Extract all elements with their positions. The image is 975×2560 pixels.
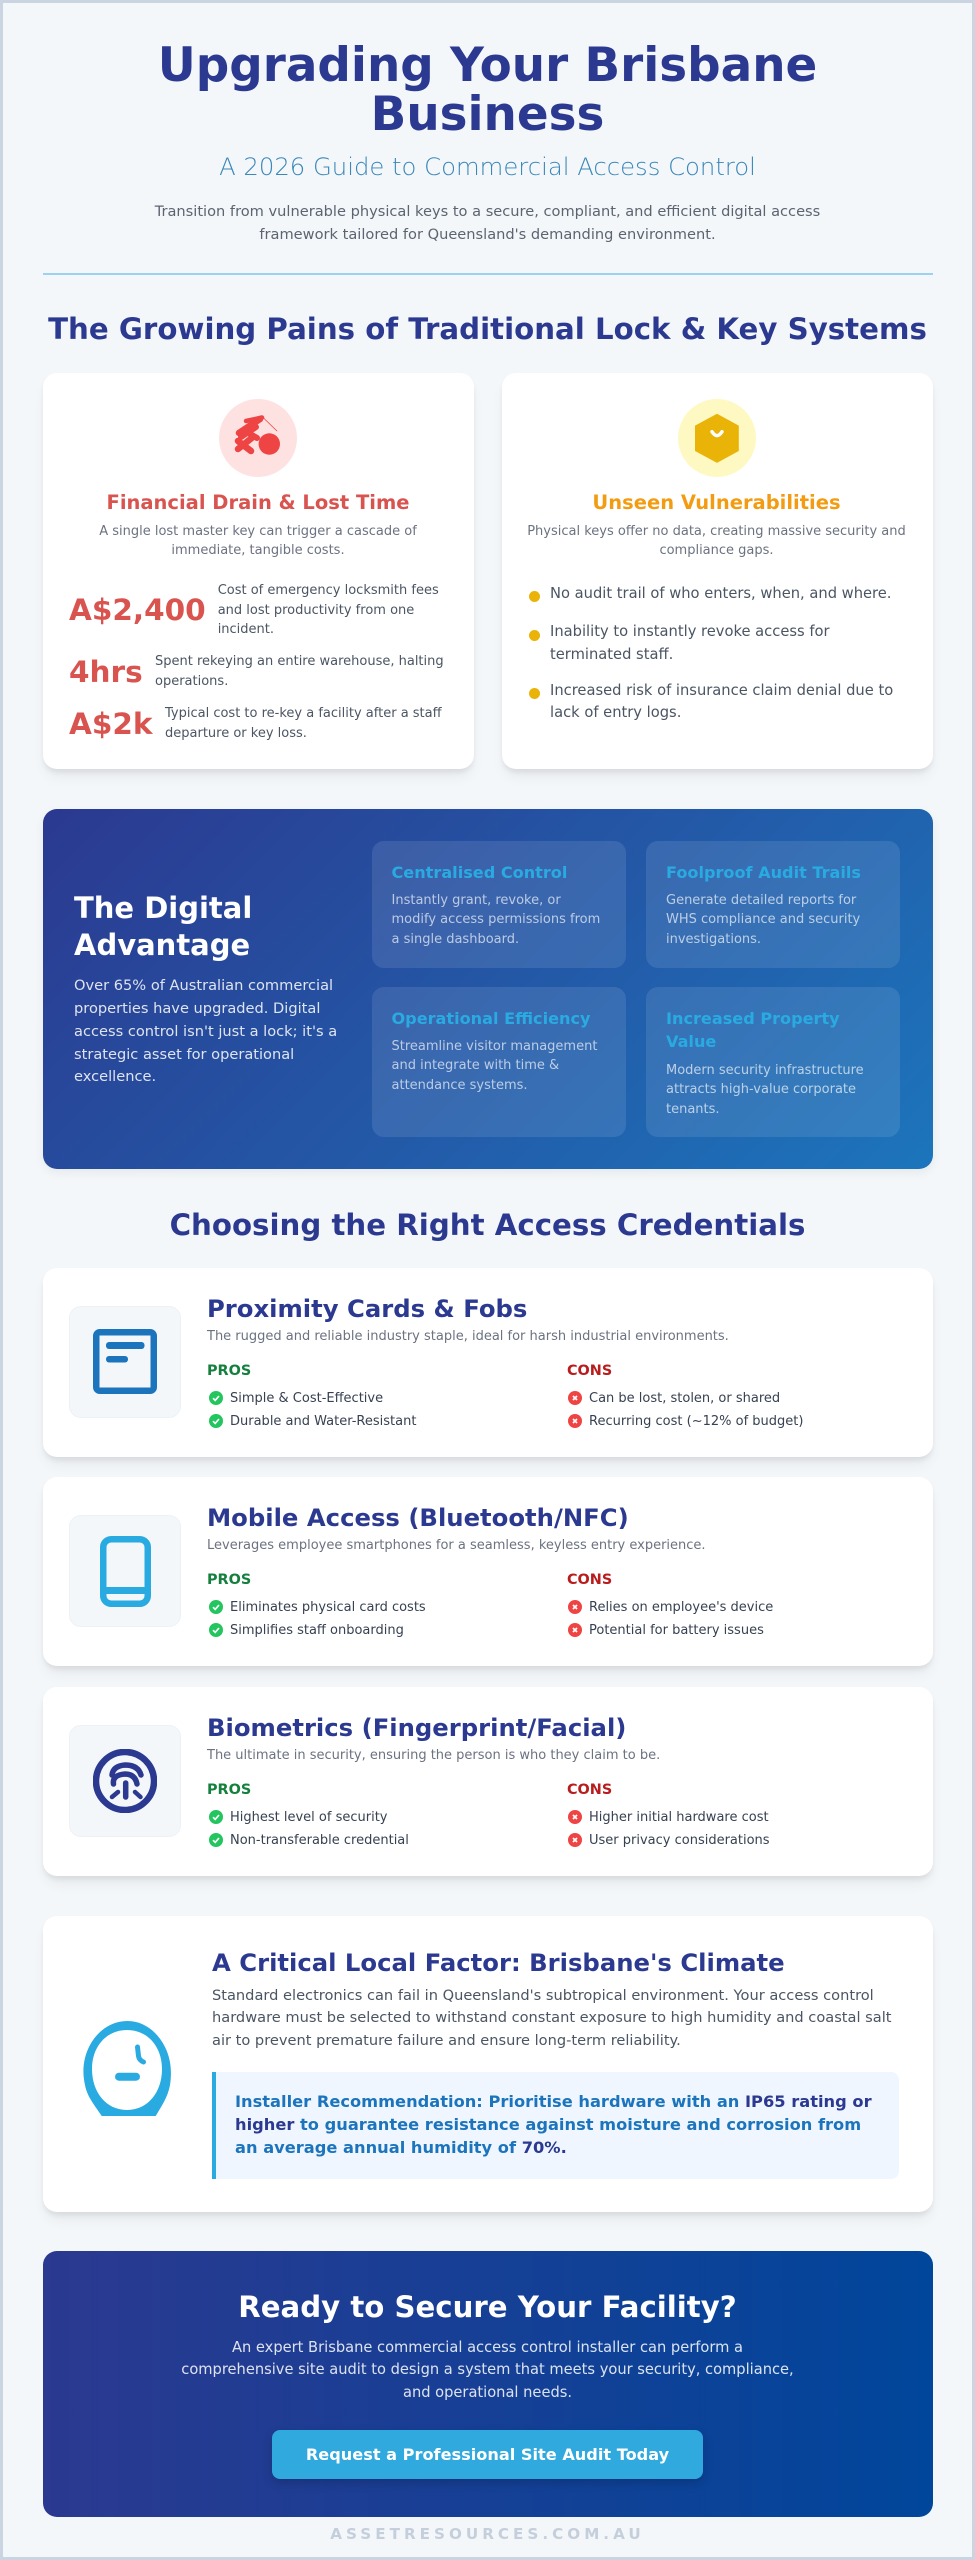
stat: 4hrs: 4hrs	[69, 655, 143, 689]
title	[158, 39, 817, 142]
text: call to action: and operational needs.	[403, 2384, 572, 2401]
icon: broken key and coin	[219, 399, 297, 477]
heading: growing pains: The Growing Pains of Traditional Lock & Key Systems	[48, 312, 927, 346]
icon: access card	[69, 1306, 181, 1418]
heading: call to action: Ready to Secure Your Facility?	[238, 2290, 737, 2324]
text: climate summary: air to prevent premature failure and ensure long-term reliability.	[212, 2032, 681, 2049]
pros list: Eliminates physical card costs	[230, 1600, 426, 1615]
pros list: Simplifies staff onboarding	[230, 1622, 404, 1638]
text: digital advantage summary: excellence.	[74, 1068, 156, 1085]
cons list	[567, 1572, 773, 1638]
text: digital advantage summary: properties have upgraded. Digital	[74, 1000, 320, 1017]
benefit: increased property value: tenants.	[666, 1102, 720, 1117]
text: digital advantage summary: access control isn't just a lock; it's a	[74, 1023, 337, 1040]
stat text: rekeying time: Spent rekeying an entire warehouse, halting	[155, 654, 444, 669]
cons list: Recurring cost (~12% of budget)	[589, 1414, 803, 1428]
benefit: centralised control: Centralised Control	[392, 863, 567, 882]
cons list: Higher initial hardware cost	[589, 1810, 769, 1825]
panel: financial drain	[43, 373, 474, 769]
bullet: insurance risk	[529, 682, 893, 721]
panel: the digital advantage	[42, 809, 932, 1169]
bullet: audit trail: No audit trail of who enters, when, and where.	[550, 584, 891, 602]
benefit: operational efficiency: Streamline visitor management	[392, 1039, 597, 1054]
icon: smartphone	[69, 1515, 181, 1627]
subtitle: A 2026 Guide to Commercial Access Control	[219, 152, 756, 181]
benefit: increased property value: Increased Property	[666, 1009, 840, 1028]
text: biometrics summary: The ultimate in security, ensuring the person is who they claim to be.	[207, 1748, 660, 1763]
callout: installer recommendation: an average annual humidity of 70%.	[235, 2138, 567, 2157]
heading: financial drain: Financial Drain & Lost Time	[106, 491, 409, 514]
text: climate summary: Standard electronics can fail in Queensland's subtropical environment. Your access control	[212, 1986, 874, 2004]
footer: website: ASSETRESOURCES.COM.AU	[330, 2524, 645, 2542]
intro text: Transition from vulnerable physical keys to a secure, compliant, and efficient digital access	[155, 203, 820, 220]
intro text	[154, 203, 820, 243]
benefit: increased property value: Modern security infrastructure	[666, 1063, 864, 1078]
text: vulnerabilities summary	[527, 524, 906, 558]
callout: installer recommendation: higher to guarantee resistance against moisture and corrosion from	[235, 2115, 861, 2134]
text: climate summary: hardware must be selected to withstand constant exposure to high humidity and coastal salt	[212, 2009, 892, 2026]
pros list: Highest level of security	[230, 1810, 388, 1825]
pros list: PROS	[207, 1782, 251, 1798]
panel: call to action	[42, 2251, 932, 2517]
text: financial summary: immediate, tangible costs.	[171, 543, 345, 558]
benefit: operational efficiency: attendance systems.	[392, 1078, 528, 1093]
intro text: framework tailored for Queensland's demanding environment.	[259, 226, 716, 243]
icon: fingerprint	[69, 1725, 181, 1837]
benefit: operational efficiency: Operational Efficiency	[392, 1009, 591, 1028]
text: digital advantage summary: strategic asset for operational	[74, 1046, 294, 1063]
callout: installer recommendation	[212, 2072, 899, 2179]
pros list: Simple & Cost-Effective	[230, 1391, 383, 1406]
bullet: revoke access: Inability to instantly revoke access for	[550, 623, 830, 640]
cons list: CONS	[567, 1782, 612, 1798]
text: proximity summary: The rugged and reliable industry staple, ideal for harsh industrial environments.	[207, 1329, 729, 1344]
cons list: Can be lost, stolen, or shared	[589, 1391, 780, 1406]
heading: proximity cards: Proximity Cards & Fobs	[207, 1294, 527, 1323]
panel: mobile access	[43, 1477, 932, 1666]
icon: hexagon shield	[678, 399, 756, 477]
text: vulnerabilities summary: Physical keys offer no data, creating massive security and	[527, 524, 906, 539]
callout: installer recommendation: Installer Recommendation: Prioritise hardware with an IP65 rating or	[235, 2092, 872, 2111]
benefit: foolproof audit trails	[646, 841, 900, 968]
pros list: Non-transferable credential	[230, 1832, 409, 1848]
pros list: Durable and Water-Resistant	[230, 1414, 416, 1428]
text: call to action: comprehensive site audit to design a system that meets your security, compliance,	[181, 2361, 794, 2378]
stat text: locksmith cost: and lost productivity from one	[218, 602, 414, 618]
stat text: rekeying time: operations.	[155, 674, 228, 688]
pros list	[207, 1782, 409, 1848]
cons list: CONS	[567, 1363, 612, 1379]
text: mobile summary: Leverages employee smartphones for a seamless, keyless entry experience.	[207, 1538, 706, 1553]
stat text: re-key cost: departure or key loss.	[165, 726, 307, 740]
bullet: revoke access: terminated staff.	[550, 646, 673, 663]
pros list: PROS	[207, 1363, 251, 1379]
heading: climate: A Critical Local Factor: Brisbane's Climate	[212, 1948, 785, 1977]
heading: digital advantage: The Digital	[74, 891, 252, 925]
cons list: Relies on employee's device	[589, 1600, 773, 1615]
stat text: locksmith cost	[218, 583, 439, 637]
stat text: locksmith cost: incident.	[218, 622, 274, 637]
title: Upgrading Your Brisbane	[158, 39, 817, 93]
benefit: foolproof audit trails: Generate detailed reports for	[666, 893, 856, 908]
header divider	[42, 272, 932, 274]
icon: humidity gauge	[83, 2021, 171, 2116]
stat text: rekeying time	[155, 654, 444, 688]
benefit: operational efficiency	[372, 987, 626, 1137]
text: climate summary	[212, 1986, 892, 2049]
heading: mobile access: Mobile Access (Bluetooth/NFC)	[207, 1503, 629, 1532]
text: call to action	[181, 2338, 794, 2401]
bullet: insurance risk: Increased risk of insurance claim denial due to	[550, 682, 893, 698]
cons list: User privacy considerations	[589, 1832, 770, 1848]
benefit: foolproof audit trails: WHS compliance and security	[666, 912, 860, 927]
panel: brisbane climate	[43, 1916, 932, 2212]
pros list	[207, 1363, 416, 1428]
heading: access credentials: Choosing the Right Access Credentials	[170, 1208, 805, 1242]
heading: unseen vulnerabilities: Unseen Vulnerabilities	[592, 491, 841, 514]
benefit: centralised control: modify access permissions from	[392, 912, 600, 927]
bullet: revoke access	[529, 623, 830, 663]
panel: unseen vulnerabilities	[502, 373, 932, 769]
panel: proximity cards	[43, 1268, 932, 1457]
benefit: increased property value: Value	[666, 1032, 716, 1050]
button: request audit: Request a Professional Site Audit Today	[306, 2445, 669, 2464]
cons list	[567, 1363, 803, 1428]
bullet: insurance risk: lack of entry logs.	[550, 704, 681, 721]
text: financial summary: A single lost master key can trigger a cascade of	[99, 524, 417, 539]
benefit: centralised control: Instantly grant, revoke, or	[392, 893, 561, 908]
pros list: PROS	[207, 1572, 251, 1588]
benefit: centralised control: a single dashboard.	[392, 932, 519, 947]
cons list	[567, 1782, 770, 1848]
pros list	[207, 1572, 426, 1638]
benefit: foolproof audit trails: Foolproof Audit Trails	[666, 863, 861, 882]
benefit: centralised control	[372, 841, 626, 968]
heading: digital advantage	[74, 891, 252, 962]
stat text: locksmith cost: Cost of emergency locksmith fees	[218, 583, 439, 598]
text: financial summary	[99, 524, 418, 558]
cons list: Potential for battery issues	[589, 1622, 764, 1638]
text: vulnerabilities summary: compliance gaps.	[659, 543, 774, 558]
button: request audit	[272, 2430, 703, 2479]
text: digital advantage summary: Over 65% of Australian commercial	[74, 977, 333, 994]
stat: A$2,400: A$2,400	[69, 593, 206, 627]
heading: digital advantage: Advantage	[74, 928, 250, 962]
stat: A$2k: A$2k	[69, 707, 153, 741]
text: digital advantage summary	[74, 977, 337, 1085]
benefit: foolproof audit trails: investigations.	[666, 932, 761, 947]
cons list: CONS	[567, 1572, 612, 1588]
stat text: re-key cost	[164, 706, 442, 740]
text: call to action: An expert Brisbane commercial access control installer can perform a	[232, 2338, 743, 2356]
panel: biometrics	[43, 1687, 932, 1876]
stat text: re-key cost: Typical cost to re-key a facility after a staff	[165, 706, 442, 721]
heading: biometrics: Biometrics (Fingerprint/Facial)	[207, 1713, 626, 1742]
benefit: increased property value: attracts high-value corporate	[666, 1082, 856, 1097]
benefit: increased property value	[646, 987, 900, 1137]
benefit: operational efficiency: and integrate with time &	[392, 1058, 559, 1073]
title: Business	[371, 88, 604, 142]
